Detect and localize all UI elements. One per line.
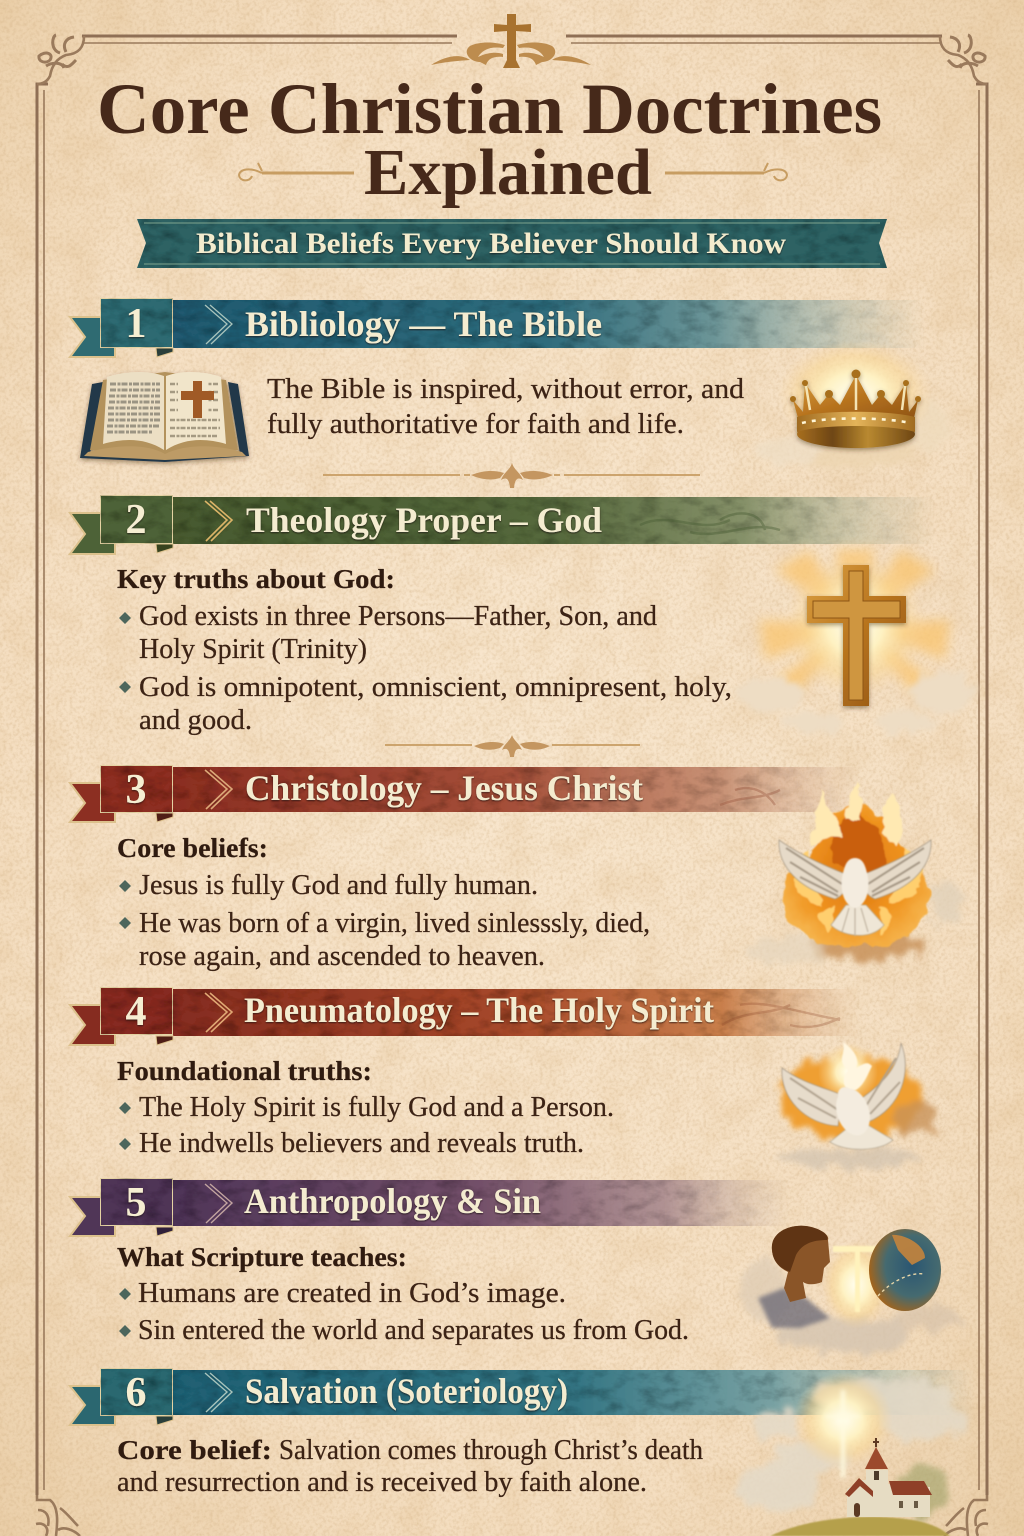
section 5 header: Anthropology and Sin: Anthropology & Sin xyxy=(244,1181,541,1221)
section 4 header: Pneumatology: 4 xyxy=(126,989,146,1035)
section 1 header: Bibliology: Bibliology — The Bible xyxy=(245,304,602,344)
section 4 text: The Holy Spirit is fully God and a Person. xyxy=(139,1092,614,1123)
icon: open Bible xyxy=(80,372,249,462)
section 1 header: Bibliology: 1 xyxy=(126,301,146,347)
divider 1 xyxy=(323,463,700,488)
title: Core Christian Doctrines xyxy=(97,69,882,149)
subtitle text: Biblical Beliefs Every Believer Should Know xyxy=(196,227,786,260)
section 6 header: Salvation: Salvation (Soteriology) xyxy=(245,1371,568,1411)
title: Explained xyxy=(364,136,652,209)
title flourishes xyxy=(239,163,787,180)
section 3 header: Christology: Christology – Jesus Christ xyxy=(245,768,643,808)
section 6 text: Salvation comes through Christ’s death xyxy=(279,1435,703,1466)
section 5 text: What Scripture teaches: xyxy=(117,1242,407,1272)
section 4 header: Pneumatology xyxy=(70,987,860,1045)
section 6 text: Core belief: xyxy=(117,1435,272,1465)
section 2 text: God is omnipotent, omniscient, omnipresent, holy, xyxy=(139,672,732,703)
section 1 header: Bibliology xyxy=(70,298,925,357)
section 6 text xyxy=(117,1435,703,1498)
section 5 header: Anthropology and Sin: 5 xyxy=(126,1180,146,1226)
icon: descending dove xyxy=(774,1042,937,1168)
section 1 text: fully authoritative for faith and life. xyxy=(267,409,684,440)
section 3 header: Christology: 3 xyxy=(126,767,146,813)
icon: top cross ornament xyxy=(431,14,591,68)
icon: church under light xyxy=(736,1372,966,1536)
section 1 text: The Bible is inspired, without error, and xyxy=(267,374,744,405)
section 2 header: Theology Proper: 2 xyxy=(126,497,146,543)
section 2 header: Theology Proper: Theology Proper – God xyxy=(246,500,602,540)
section 4 text: He indwells believers and reveals truth. xyxy=(139,1128,584,1159)
dove xyxy=(779,840,931,936)
section 1 text xyxy=(267,374,744,440)
section 4 text: Foundational truths: xyxy=(117,1056,372,1086)
section 5 text xyxy=(117,1242,689,1346)
section 6 header: Salvation: 6 xyxy=(126,1370,146,1416)
section 4 header: Pneumatology: Pneumatology – The Holy Spirit xyxy=(244,990,714,1030)
section 2 text: Holy Spirit (Trinity) xyxy=(139,634,367,665)
section 2 text xyxy=(117,564,732,736)
section 6 header: Salvation xyxy=(70,1368,975,1425)
dove xyxy=(782,1043,905,1149)
section 2 text: God exists in three Persons—Father, Son, and xyxy=(139,601,657,632)
title xyxy=(97,69,882,209)
section 3 text: Jesus is fully God and fully human. xyxy=(139,870,538,901)
section 2 text: and good. xyxy=(139,705,252,736)
subtitle ribbon xyxy=(137,219,887,268)
section 2 text: Key truths about God: xyxy=(117,564,395,594)
section 2 header: Theology Proper xyxy=(70,495,935,554)
section 3 header: Christology xyxy=(70,765,860,822)
section 3 text: He was born of a virgin, lived sinlesssly, died, xyxy=(139,908,650,939)
icon: golden crown xyxy=(758,340,949,468)
section 3 text: Core beliefs: xyxy=(117,833,268,863)
section 3 text xyxy=(117,833,650,972)
icon: person, cross and globe xyxy=(741,1226,959,1353)
section 5 text: Humans are created in God’s image. xyxy=(138,1278,566,1309)
section 5 text: Sin entered the world and separates us from God. xyxy=(138,1315,689,1346)
section 6 text: and resurrection and is received by faith alone. xyxy=(117,1467,647,1498)
divider 2 xyxy=(385,735,640,757)
section 3 text: rose again, and ascended to heaven. xyxy=(139,941,545,972)
icon: dove in flames xyxy=(750,782,963,964)
section 4 text xyxy=(117,1056,614,1159)
icon: radiant golden cross xyxy=(736,550,972,732)
section 5 header: Anthropology and Sin xyxy=(70,1178,790,1236)
